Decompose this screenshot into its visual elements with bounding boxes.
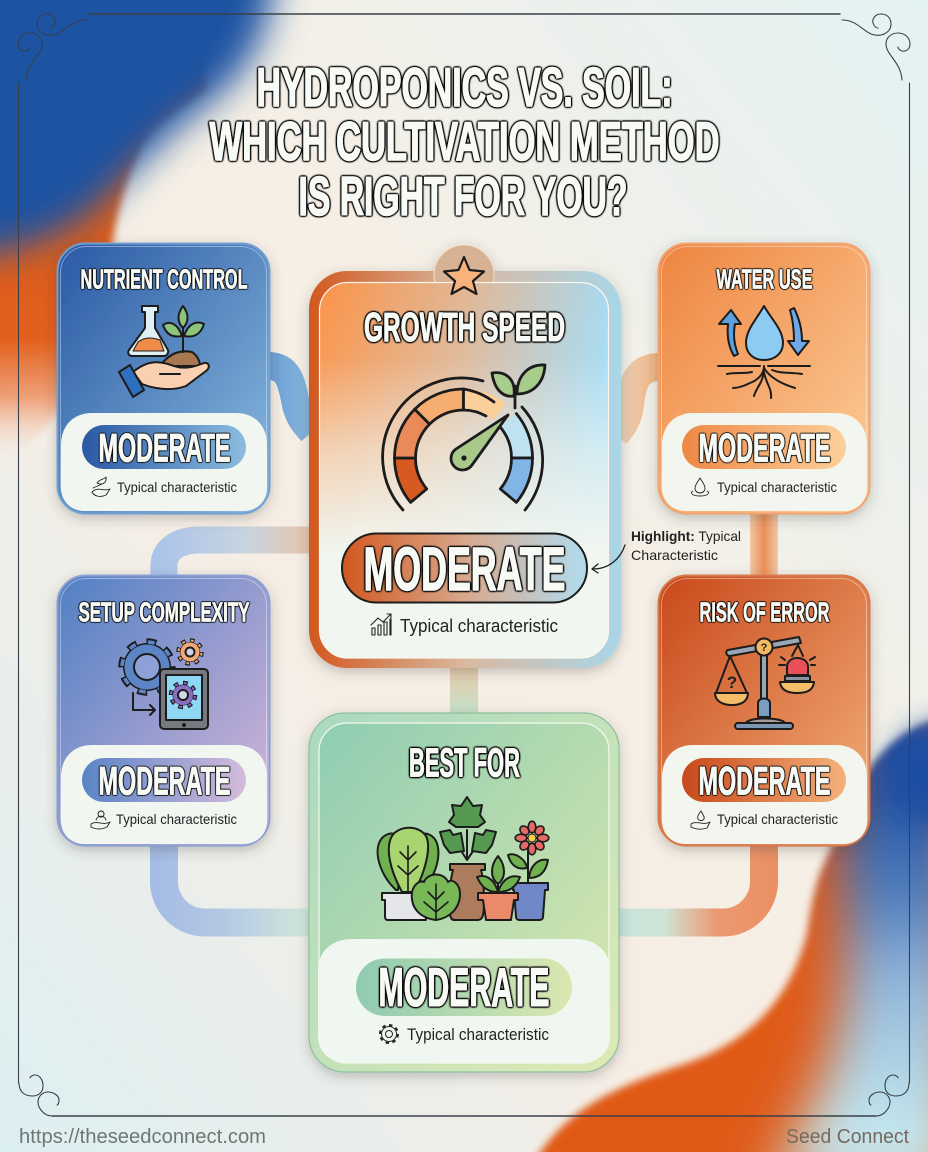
caption: best for: Typical characteristic	[407, 1026, 549, 1044]
value: best for: MODERATE	[378, 956, 550, 1018]
title: IS RIGHT FOR YOU?	[298, 165, 628, 227]
heading: nutrient control: NUTRIENT CONTROL	[80, 264, 248, 294]
card surface	[319, 723, 609, 1063]
heading: setup complexity: SETUP COMPLEXITY	[78, 596, 250, 628]
icon: potted plants	[378, 797, 549, 920]
icon: flask, plant and hand	[119, 306, 209, 397]
panel: water use	[658, 244, 870, 514]
icon: hand with sprout	[92, 477, 110, 496]
value pill: setup complexity	[82, 758, 246, 802]
icon: rising bar chart	[371, 614, 391, 635]
card surface	[320, 282, 608, 658]
callout: highlight arrow and note: Characteristic	[631, 547, 718, 563]
panel: setup complexity	[58, 576, 270, 846]
caption: growth speed: Typical characteristic	[400, 616, 558, 636]
label: scale question marks	[727, 642, 768, 692]
value: setup complexity: MODERATE	[98, 760, 230, 804]
icon: speedometer with sprout	[383, 365, 545, 510]
heading: growth speed: GROWTH SPEED	[364, 304, 565, 350]
panel: growth speed	[309, 245, 621, 668]
value panel: nutrient control	[61, 413, 267, 511]
tab: star badge	[436, 257, 492, 294]
caption: water use: Typical characteristic	[717, 479, 837, 495]
icon: hand with person	[91, 811, 110, 829]
value pill: risk of error	[682, 758, 846, 802]
value pill: water use	[682, 425, 846, 469]
icon: gears and tablet	[122, 640, 208, 729]
connector lines	[164, 366, 778, 922]
title	[210, 56, 720, 227]
footer url: https://theseedconnect.com	[19, 1126, 266, 1148]
icon: water cycle with roots	[718, 306, 810, 398]
label: scale question marks: ?	[727, 673, 737, 692]
icon: balance scale	[715, 637, 815, 729]
callout: highlight arrow and note	[592, 528, 741, 573]
callout: highlight arrow and note: Highlight: Typical	[631, 528, 741, 544]
heading: best for: BEST FOR	[409, 740, 520, 786]
value: growth speed: MODERATE	[364, 535, 566, 603]
panel: nutrient control	[58, 244, 270, 514]
value: nutrient control: MODERATE	[98, 426, 230, 470]
value: water use: MODERATE	[698, 426, 830, 470]
value panel: best for	[318, 939, 610, 1063]
icon: droplet with ripples	[691, 478, 709, 496]
caption: risk of error: Typical characteristic	[717, 811, 838, 827]
heading: water use: WATER USE	[716, 264, 812, 294]
label: scale question marks: ?	[761, 642, 768, 654]
value panel: risk of error	[662, 745, 867, 844]
caption: nutrient control: Typical characteristic	[117, 479, 237, 495]
title: HYDROPONICS VS. SOIL:	[256, 56, 672, 118]
value panel: water use	[662, 413, 867, 511]
footer brand: Seed Connect	[786, 1126, 909, 1148]
value panel: setup complexity	[61, 745, 267, 844]
card frame	[309, 245, 621, 668]
panel: risk of error	[658, 576, 870, 846]
value pill: growth speed	[342, 534, 587, 602]
value pill: nutrient control	[82, 425, 246, 469]
heading: risk of error: RISK OF ERROR	[700, 596, 830, 628]
panel: best for	[309, 713, 619, 1072]
value pill: best for	[356, 958, 572, 1016]
icon: gear outline	[380, 1025, 398, 1043]
value: risk of error: MODERATE	[698, 760, 830, 804]
caption: setup complexity: Typical characteristic	[116, 811, 237, 827]
icon: hand with flame	[691, 811, 710, 829]
